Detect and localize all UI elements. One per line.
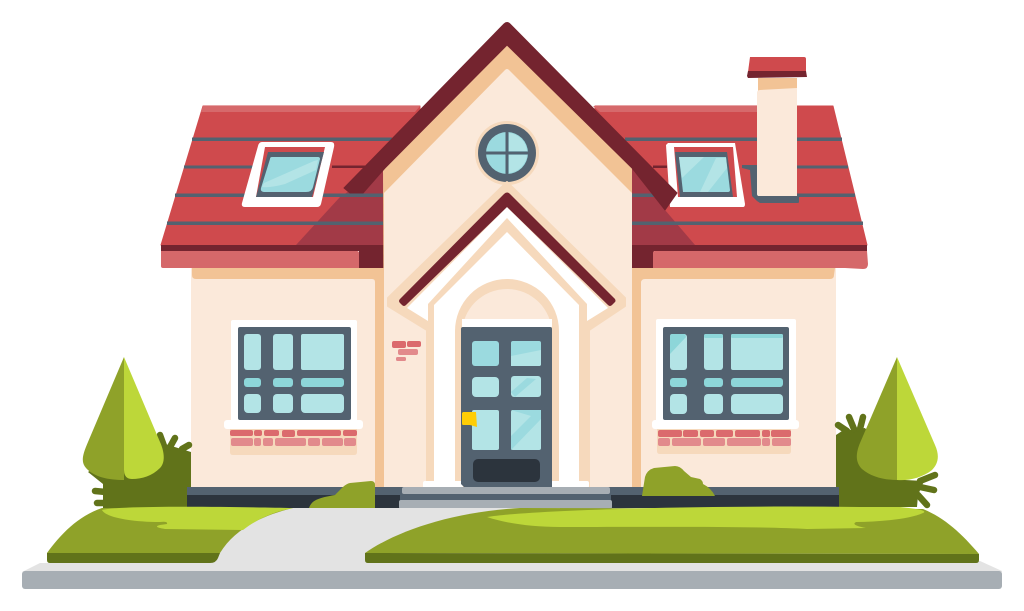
left hedge bbox=[88, 432, 191, 508]
right window bbox=[652, 319, 799, 429]
left shrub bbox=[309, 481, 375, 508]
right hedge bbox=[836, 417, 935, 507]
right dormer window bbox=[666, 143, 745, 207]
front door bbox=[461, 327, 552, 487]
left lawn bbox=[47, 507, 293, 563]
right lawn bbox=[365, 507, 979, 563]
left roof bbox=[161, 106, 420, 268]
gable roof trim bbox=[344, 22, 677, 210]
round attic window bbox=[475, 121, 539, 185]
left window bricks bbox=[230, 429, 357, 455]
left dormer window bbox=[242, 142, 334, 207]
chimney bbox=[742, 57, 807, 203]
porch bbox=[388, 182, 625, 488]
left wall bbox=[191, 268, 384, 490]
door handle bbox=[462, 412, 477, 427]
central gable bbox=[383, 45, 632, 488]
left window bbox=[224, 320, 363, 429]
foundation and steps bbox=[187, 487, 839, 509]
ground slab bbox=[22, 561, 1002, 589]
left tree bbox=[83, 357, 164, 480]
right wall bbox=[632, 268, 836, 490]
right window bricks bbox=[657, 429, 791, 454]
walkway bbox=[205, 508, 560, 566]
wall bricks bbox=[392, 341, 421, 361]
right shrub bbox=[642, 466, 715, 496]
right roof bbox=[593, 106, 868, 269]
right tree bbox=[857, 357, 938, 480]
